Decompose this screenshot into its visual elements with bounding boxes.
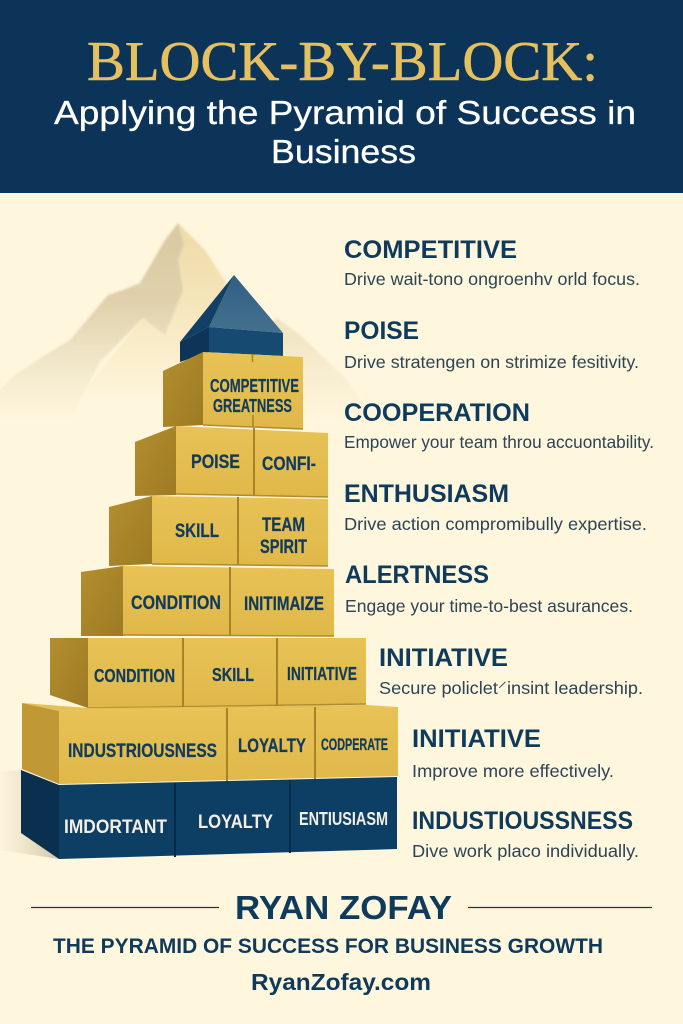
list item: poise: POISE	[344, 317, 419, 345]
block row: industriousness, loyalty, codperate	[22, 703, 398, 784]
list item: industioussness: INDUSTIOUSSNESS	[412, 807, 633, 835]
block row: skill, team spirit: SPIRIT	[260, 537, 307, 558]
block row: important, loyalty, enthusiasm (navy base): LOYALTY	[198, 812, 273, 833]
block row: condition, initimaize	[81, 566, 334, 636]
list item: competitive: COMPETITIVE	[344, 236, 517, 264]
list item: alertness: Engage your time-to-best asurances.	[345, 596, 633, 616]
block row: competitive greatness: GREATNESS	[213, 395, 292, 416]
block row: competitive greatness: COMPETITIVE	[210, 375, 299, 396]
list item: initiative (upper)	[379, 644, 643, 698]
block row: skill, team spirit: TEAM	[262, 515, 305, 536]
list item: poise: Drive stratengen on strimize fesitivity.	[344, 352, 639, 372]
block row: poise, confi-	[135, 426, 328, 497]
block row: condition, initimaize: INITIMAIZE	[244, 594, 324, 615]
block row: important, loyalty, enthusiasm (navy base)	[21, 770, 397, 859]
list item: cooperation: COOPERATION	[344, 399, 530, 427]
list item: industioussness: Dive work placo individually.	[412, 841, 639, 861]
block row: skill, team spirit: SKILL	[175, 521, 219, 542]
illustration: mountain	[0, 223, 375, 420]
list item: industioussness	[412, 807, 639, 861]
list item: enthusiasm	[344, 480, 647, 534]
footer tagline: THE PYRAMID OF SUCCESS FOR BUSINESS GROWTH	[53, 935, 603, 958]
list item: cooperation: Empower your team throu accuontability.	[344, 432, 654, 452]
subtitle	[54, 94, 636, 170]
list item: enthusiasm: ENTHUSIASM	[344, 480, 509, 508]
block row: condition, skill, initiative: SKILL	[212, 665, 254, 685]
list item: competitive: Drive wait-tono ongroenhv orld focus.	[344, 269, 640, 289]
block row: important, loyalty, enthusiasm (navy base): ENTIUSIASM	[299, 809, 388, 829]
capstone	[180, 275, 283, 362]
block row: condition, skill, initiative: CONDITION	[94, 666, 175, 686]
block row: poise, confi-: CONFI-	[262, 454, 316, 475]
footer name: RYAN ZOFAY	[235, 889, 452, 926]
footer	[53, 889, 603, 995]
list item: initiative (upper): Secure policlet⸍insint leadership.	[379, 678, 643, 698]
list item: initiative (lower)	[412, 725, 614, 781]
ground shadow	[0, 770, 59, 859]
list item: initiative (lower): Improve more effectively.	[412, 761, 614, 781]
list item: competitive	[344, 236, 640, 289]
subtitle: Applying the Pyramid of Success in	[54, 94, 636, 131]
list item: enthusiasm: Drive action compromibully expertise.	[344, 514, 647, 534]
list item: cooperation	[344, 399, 654, 452]
title: BLOCK-BY-BLOCK:	[87, 31, 598, 93]
block row: poise, confi-: POISE	[191, 452, 240, 473]
list item: initiative (upper): INITIATIVE	[379, 644, 508, 672]
footer website: RyanZofay.com	[251, 969, 431, 995]
list item: poise	[344, 317, 639, 372]
block row: skill, team spirit	[109, 496, 328, 566]
block row: industriousness, loyalty, codperate: LOYALTY	[238, 736, 306, 757]
list item: alertness	[345, 561, 633, 616]
pyramid	[21, 275, 398, 859]
block row: industriousness, loyalty, codperate: CODPERATE	[321, 735, 388, 754]
list item: alertness: ALERTNESS	[345, 561, 489, 589]
block row: important, loyalty, enthusiasm (navy base): IMDORTANT	[64, 817, 167, 838]
block row: competitive greatness	[163, 352, 303, 429]
list item: initiative (lower): INITIATIVE	[412, 725, 541, 753]
block row: condition, initimaize: CONDITION	[131, 593, 221, 614]
block row: industriousness, loyalty, codperate: INDUSTRIOUSNESS	[68, 741, 217, 762]
subtitle: Business	[271, 133, 416, 170]
block row: condition, skill, initiative	[50, 638, 366, 708]
block row: condition, skill, initiative: INITIATIVE	[287, 664, 357, 684]
header banner	[0, 0, 683, 193]
